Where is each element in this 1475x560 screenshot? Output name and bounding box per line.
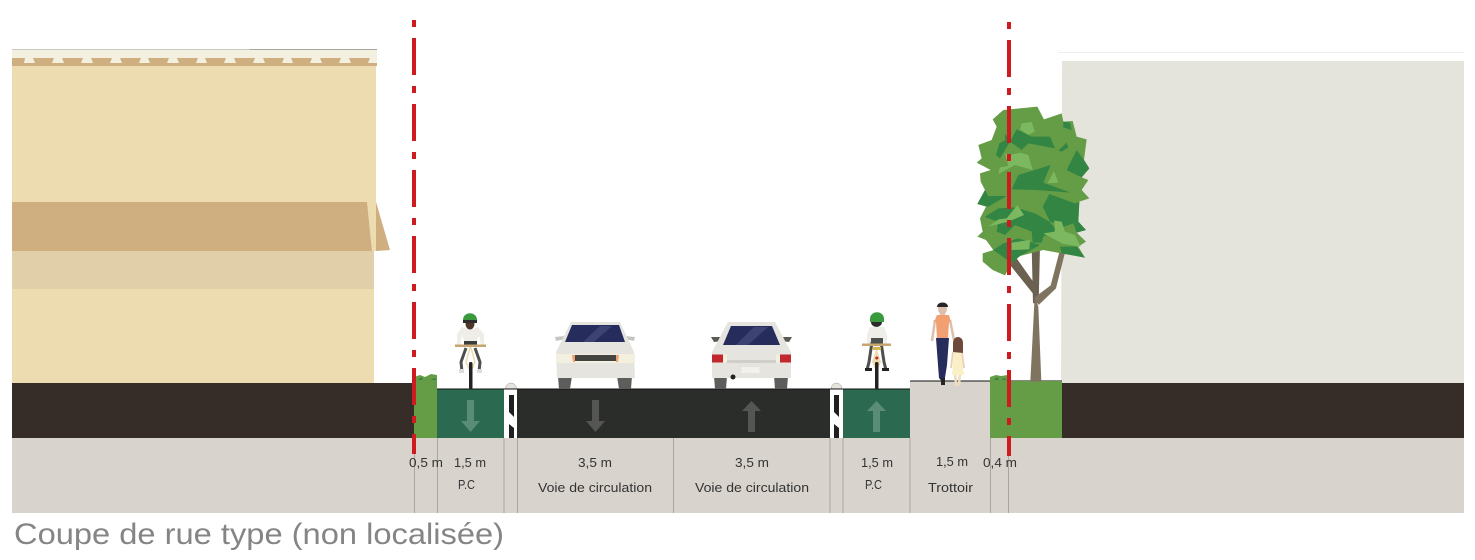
label 3,5 m right: 3,5 m [735, 456, 769, 470]
building: left facade [12, 49, 390, 383]
label P.C right: P.C [865, 478, 882, 492]
cycle lane right [843, 389, 910, 438]
label P.C left: P.C [458, 478, 475, 492]
tree [977, 107, 1089, 382]
label 3,5 m left: 3,5 m [578, 456, 612, 470]
label 1,5 m right: 1,5 m [861, 456, 893, 470]
tree foliage [977, 107, 1089, 275]
label voie de circulation right: Voie de circulation [695, 481, 809, 495]
car front view [555, 322, 635, 389]
caption: Coupe de rue type (non localisée) [14, 518, 504, 551]
separator bollard left [504, 383, 517, 438]
label trottoir: Trottoir [928, 481, 973, 495]
planting strip right [990, 375, 1062, 438]
arrow: road down [586, 400, 605, 432]
dimension separators [414, 438, 1008, 513]
tree trunk and branches [1003, 227, 1071, 382]
cycle lane left [437, 389, 504, 438]
label 1,5 m left: 1,5 m [454, 456, 486, 470]
label 0,4 m: 0,4 m [983, 456, 1017, 470]
red boundary line left [412, 20, 416, 454]
label voie de circulation left: Voie de circulation [538, 481, 652, 495]
planting strip left [414, 374, 437, 438]
label 1,5 m sidewalk: 1,5 m [936, 455, 968, 469]
pedestrian child [951, 337, 964, 386]
road surface line [437, 388, 910, 390]
dimension band [12, 438, 1464, 513]
label 0,5 m: 0,5 m [409, 456, 443, 470]
arrow: road up [742, 401, 761, 432]
ground: left dark strip [12, 383, 414, 438]
arrow: cycle lane left down [461, 400, 480, 432]
cyclist right [862, 312, 891, 389]
building: right facade [1058, 52, 1464, 383]
dimension labels [409, 455, 1017, 495]
pedestrian adult [932, 302, 954, 385]
car rear view [711, 322, 792, 389]
red boundary line right [1007, 22, 1011, 456]
cyclist left [455, 313, 486, 389]
ground: right dark strip [1062, 383, 1464, 438]
arrow: cycle lane right up [867, 401, 886, 432]
road [517, 389, 830, 438]
sidewalk [910, 380, 1062, 438]
separator bollard right [830, 383, 843, 438]
